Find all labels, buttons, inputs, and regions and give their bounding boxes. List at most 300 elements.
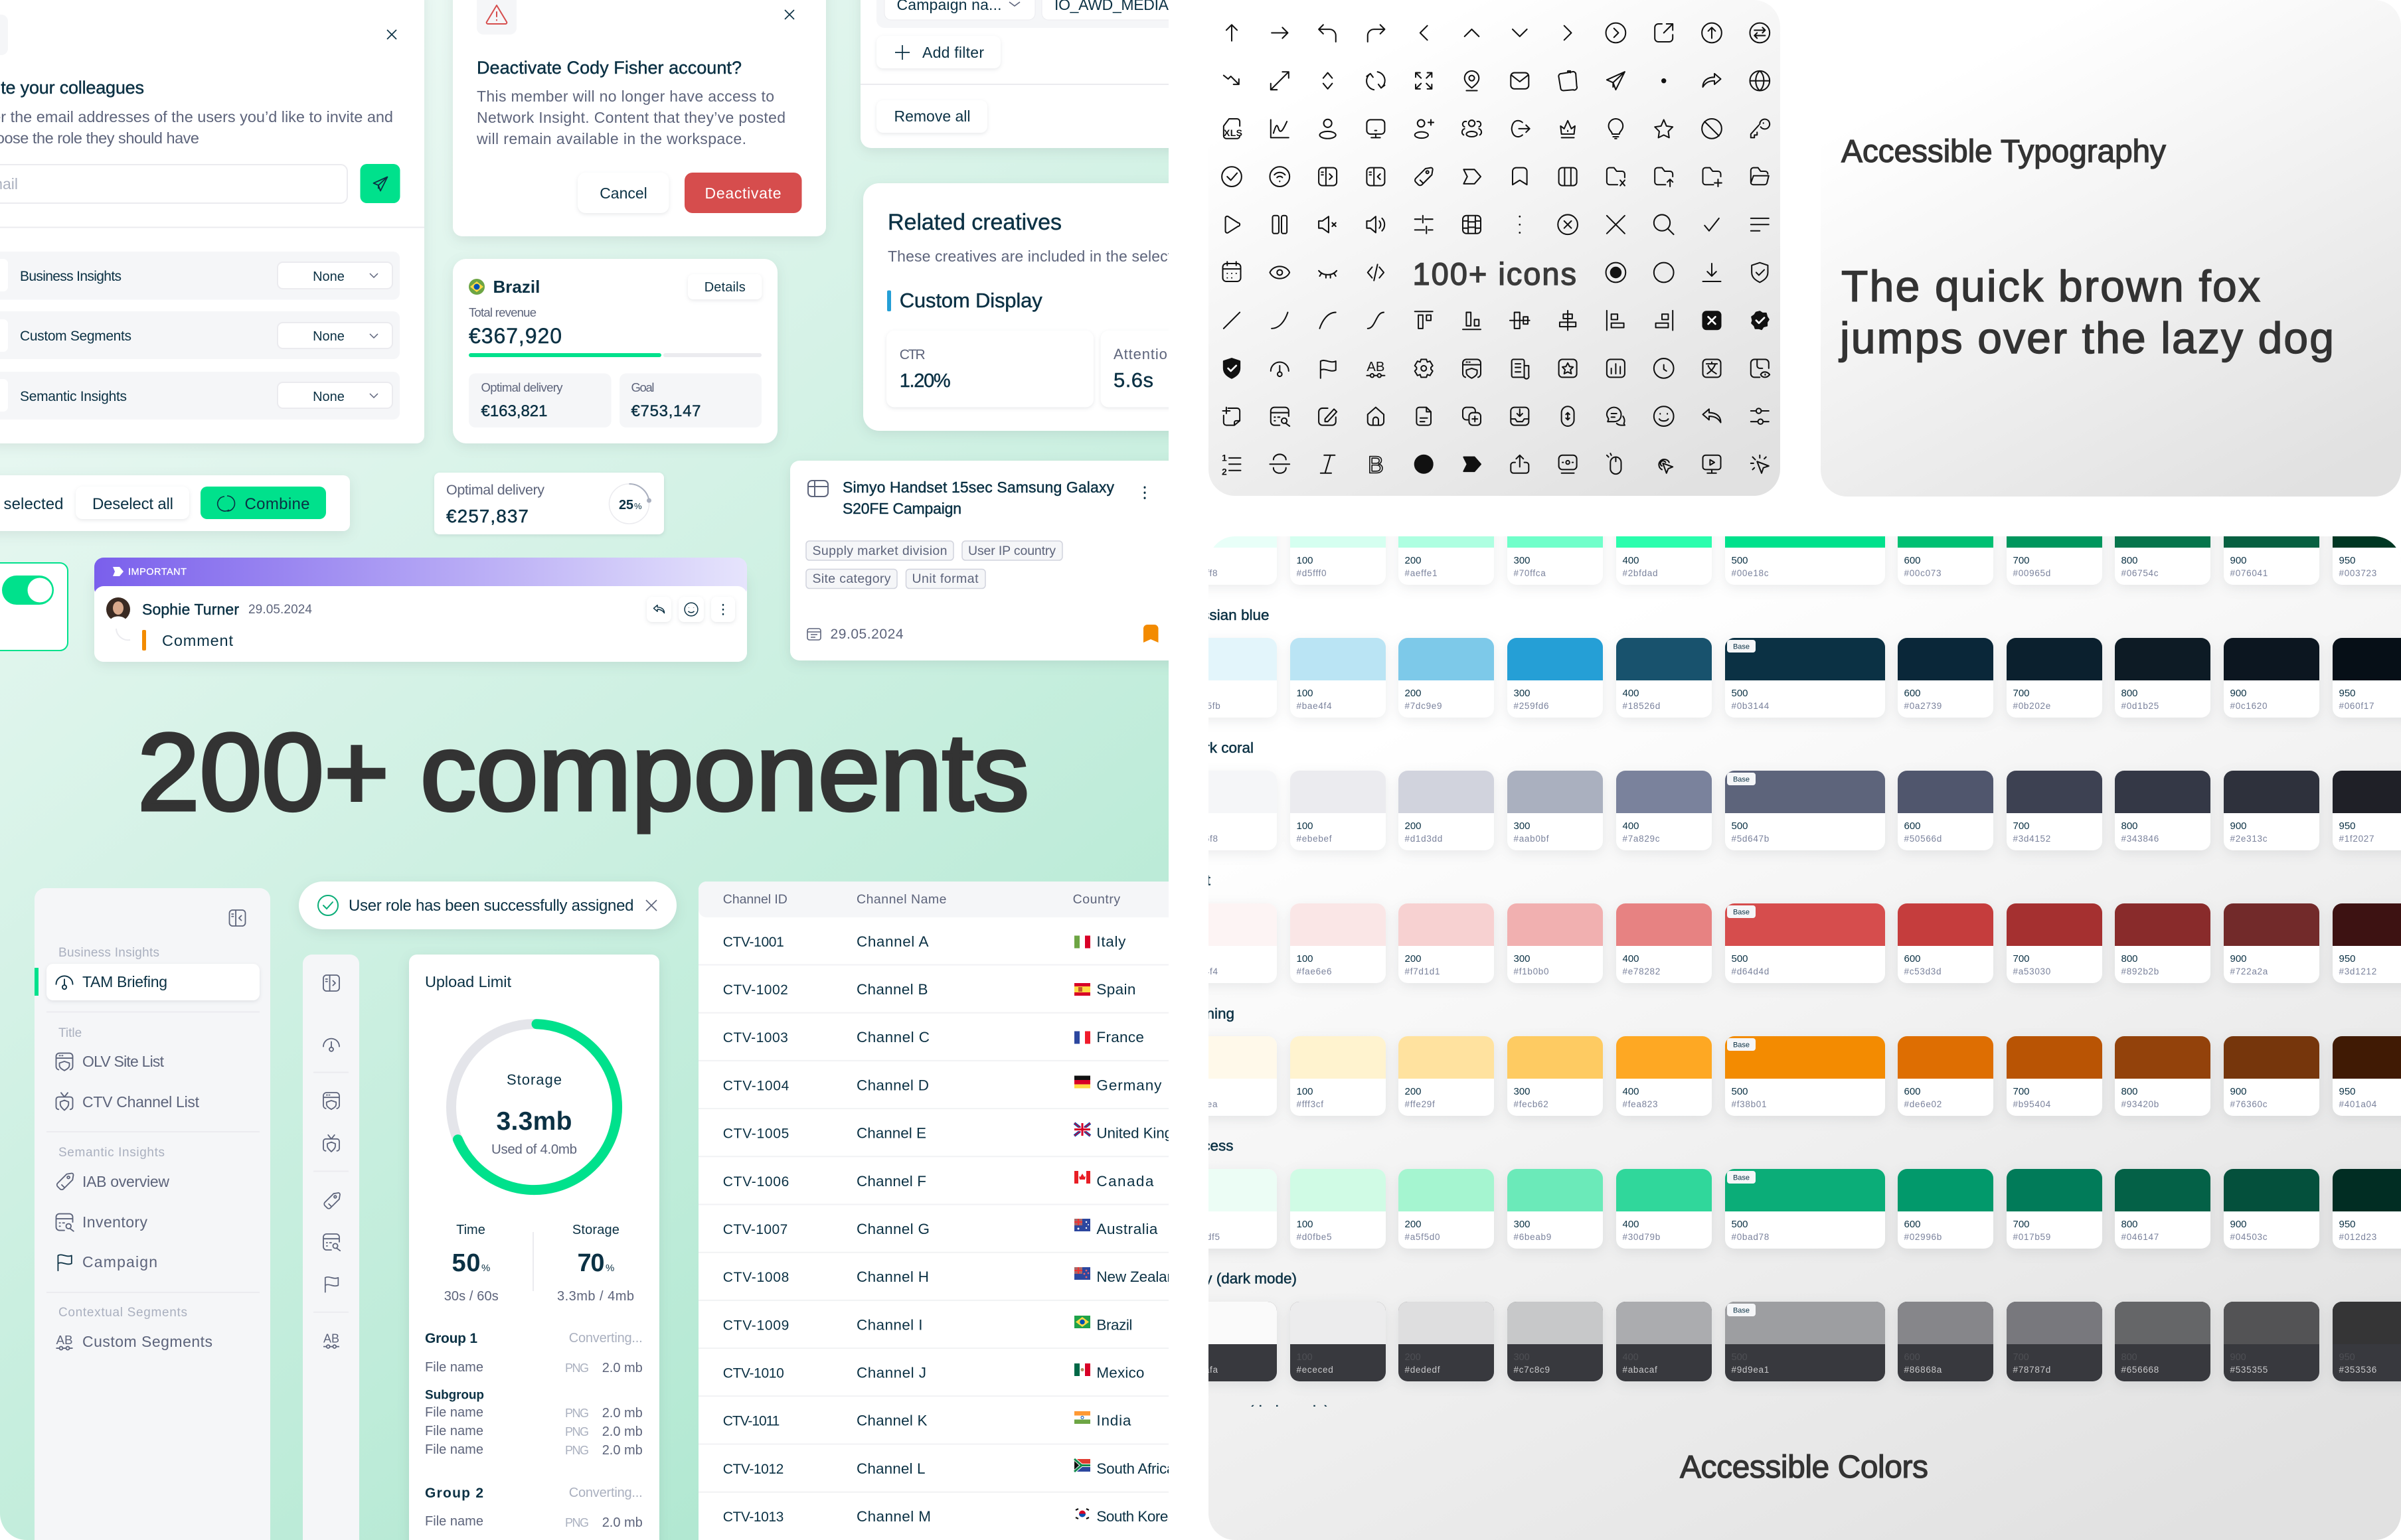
palette row: dark coral: 500	[1732, 820, 1748, 832]
heading: accessible colors: Accessible Colors	[1680, 1450, 1928, 1485]
palette row: primary green: #2bfdad	[1623, 568, 1658, 578]
palette row: success: 50	[1187, 1219, 1199, 1230]
panel: channel table: Italy	[1096, 933, 1126, 950]
panel: channel table: Germany	[1096, 1077, 1162, 1094]
panel: channel table: CTV-1005	[723, 1126, 789, 1142]
panel: Brazil revenue card: €753,147	[631, 402, 701, 420]
heading: clipped grey section label: (dark mode)	[1249, 1403, 1329, 1419]
panel: accessible colors	[1177, 505, 2401, 1540]
palette row: dark coral: 600	[1904, 820, 1921, 832]
panel: upload limit card: Group 1	[425, 1331, 477, 1346]
panel: related creatives card	[863, 183, 1169, 435]
panel: deactivate account modal	[453, 0, 826, 236]
panel: channel table: CTV-1009	[723, 1318, 789, 1333]
palette row: alert: #f7d1d1	[1405, 966, 1440, 976]
panel: combine action bar	[0, 475, 350, 531]
palette row: success: #6beab9	[1514, 1232, 1552, 1242]
palette row: Prussian blue: #bae4f4	[1296, 701, 1332, 711]
panel: channel table: Australia	[1096, 1221, 1158, 1237]
panel: channel table: CTV-1008	[723, 1270, 789, 1285]
panel: deactivate account modal: This member will no longer have access to	[477, 88, 774, 105]
panel: Brazil revenue card: €163,821	[481, 402, 547, 420]
palette row: grey dark mode: #656668	[2121, 1365, 2159, 1375]
palette row: warning: #b95404	[2013, 1099, 2051, 1109]
palette row: dark coral: 800	[2121, 820, 2138, 832]
panel: important comment card: Comment	[162, 632, 233, 649]
icon: flag Italy	[1074, 936, 1090, 948]
palette row: primary green: 500	[1732, 555, 1748, 566]
palette row: warning: 500	[1732, 1086, 1748, 1097]
palette row: dark coral: 400	[1623, 820, 1639, 832]
palette row: alert: 500	[1732, 953, 1748, 964]
icon: flag Mexico	[1074, 1363, 1090, 1376]
panel: campaign card: Unit format	[912, 572, 979, 586]
palette row: grey dark mode: #fafafa	[1187, 1365, 1218, 1375]
heading: warning: Warning	[1179, 1005, 1234, 1022]
icon: flag Spain	[1074, 983, 1090, 996]
palette row: Prussian blue: #0b3144	[1732, 701, 1770, 711]
heading: accessible typography: Accessible Typography	[1841, 134, 2166, 169]
palette row: primary green: #e8fff8	[1187, 568, 1218, 578]
palette row: Prussian blue: #0d1b25	[2121, 701, 2159, 711]
palette row: grey dark mode	[1181, 1302, 2401, 1381]
panel: upload limit card: 3.3mb / 4mb	[557, 1289, 634, 1304]
panel: invite colleagues modal: Semantic Insights	[20, 389, 127, 404]
palette row: warning: 800	[2121, 1086, 2138, 1097]
palette row: grey dark mode: 700	[2013, 1352, 2029, 1363]
palette row: primary green: 200	[1405, 555, 1422, 566]
panel: channel table: Canada	[1096, 1173, 1154, 1190]
palette row: alert	[1181, 903, 2401, 983]
palette row: alert: #c53d3d	[1904, 966, 1942, 976]
palette row: success: 800	[2121, 1219, 2138, 1230]
panel: channel table: Channel M	[857, 1508, 931, 1525]
panel: optimal delivery card: 25	[619, 498, 633, 512]
panel: upload limit card: Converting...	[569, 1331, 643, 1346]
palette row: warning: #fea823	[1623, 1099, 1658, 1109]
palette row: dark coral: 700	[2013, 820, 2030, 832]
panel: related creatives card: Related creatives	[888, 210, 1062, 235]
panel: channel table: CTV-1013	[723, 1509, 784, 1525]
panel: optimal delivery card	[434, 473, 664, 534]
palette row: primary green: 600	[1904, 555, 1921, 566]
panel: toggle card	[0, 563, 68, 651]
palette row: alert: 300	[1514, 953, 1531, 964]
panel: channel table: Channel I	[857, 1317, 923, 1333]
panel: channel table: Channel Name	[857, 892, 947, 907]
panel: channel table: United Kingdom	[1096, 1124, 1201, 1142]
panel: Brazil revenue card: Total revenue	[469, 305, 537, 319]
palette row: warning: #401a04	[2339, 1099, 2377, 1109]
panel: invite colleagues modal	[0, 0, 424, 443]
palette row: primary green: #d5fff0	[1296, 568, 1327, 578]
palette row: alert: #722a2a	[2230, 966, 2268, 976]
palette row: warning: #fecb62	[1514, 1099, 1548, 1109]
palette row: dark coral: 300	[1514, 820, 1531, 832]
palette row: grey dark mode: 800	[2121, 1352, 2137, 1363]
palette row: Prussian blue: 400	[1623, 688, 1639, 699]
panel: upload limit card: File name	[425, 1442, 483, 1457]
panel: upload limit card: %	[481, 1263, 490, 1274]
panel: collapsed sidebar	[303, 955, 359, 1540]
palette row: primary green: 50	[1187, 555, 1199, 566]
palette row: success: #046147	[2121, 1232, 2159, 1242]
palette row: warning: 950	[2339, 1086, 2356, 1097]
palette row: grey dark mode: 900	[2230, 1352, 2246, 1363]
palette row: success: 700	[2013, 1219, 2030, 1230]
text block: pangram sample	[1839, 262, 2334, 362]
palette row: Prussian blue: #259fd6	[1514, 701, 1549, 711]
panel: optimal delivery card: €257,837	[446, 506, 529, 526]
palette row: success: #04503c	[2230, 1232, 2268, 1242]
panel: upload limit card: Storage	[507, 1071, 562, 1088]
heading: success: Success	[1177, 1138, 1234, 1154]
panel: upload limit card: 3.3mb	[497, 1107, 572, 1136]
icon: flag India	[1074, 1411, 1090, 1424]
palette row: dark coral: #50566d	[1904, 834, 1942, 844]
panel: upload limit card: 2.0 mb	[602, 1406, 643, 1421]
palette row: Prussian blue: 600	[1904, 688, 1921, 699]
panel: channel table: South Africa	[1096, 1460, 1175, 1477]
palette row: warning: #ffe29f	[1405, 1099, 1435, 1109]
palette row: dark coral: #d1d3dd	[1405, 834, 1443, 844]
palette row: grey dark mode: #dededf	[1405, 1365, 1440, 1375]
panel: related creatives card: These creatives are included in the selected	[888, 248, 1189, 265]
palette row: alert: 400	[1623, 953, 1639, 964]
palette row: success: #30d79b	[1623, 1232, 1661, 1242]
palette row: primary green: #06754c	[2121, 568, 2159, 578]
panel: navigation sidebar: Contextual Segments	[58, 1306, 187, 1320]
palette row: dark coral: 50	[1187, 820, 1199, 832]
palette row: success: 100	[1296, 1219, 1313, 1230]
panel: channel table: Channel H	[857, 1269, 929, 1285]
palette row: grey dark mode: #9d9ea1	[1732, 1365, 1770, 1375]
heading: 100+ icons: 100+ icons	[1413, 256, 1576, 291]
palette row: warning: #fff9ea	[1187, 1099, 1218, 1109]
panel: invite colleagues modal: Business Insights	[20, 269, 122, 284]
panel: navigation sidebar: Business Insights	[58, 946, 159, 960]
panel: upload limit card: Time	[456, 1223, 485, 1237]
palette row: grey dark mode: #c7c8c9	[1514, 1365, 1550, 1375]
panel: channel table: New Zealand	[1096, 1269, 1183, 1285]
icon: flag Canada	[1074, 1171, 1090, 1184]
text block: pangram sample: The quick brown fox	[1841, 262, 2260, 311]
panel: channel table: Channel L	[857, 1460, 926, 1477]
palette row: success: 200	[1405, 1219, 1422, 1230]
panel: upload limit card: Upload Limit	[425, 973, 511, 990]
icon grid: 100+ line icons: XLS	[1224, 127, 1242, 138]
panel: upload limit card: Converting...	[569, 1486, 643, 1500]
panel: deactivate account modal: will remain available in the workspace.	[476, 130, 746, 147]
heading: Prussian blue: Prussian blue	[1179, 607, 1270, 623]
icon grid: 100+ line icons: B	[1368, 451, 1384, 478]
panel: upload limit card: File name	[425, 1424, 483, 1438]
palette row: grey dark mode: 600	[1904, 1352, 1920, 1363]
panel: upload limit card: PNG	[565, 1361, 589, 1375]
panel: campaign card: Supply market division	[813, 544, 947, 558]
palette row: grey dark mode: #abacaf	[1623, 1365, 1657, 1375]
callout: success toast	[299, 882, 677, 929]
panel: channel table: Channel C	[857, 1029, 930, 1045]
panel: channel table: South Korea	[1096, 1508, 1177, 1525]
palette row: alert: #892b2b	[2121, 966, 2159, 976]
heading: dark coral: Dark coral	[1185, 739, 1254, 756]
palette row: success: #012d23	[2339, 1232, 2377, 1242]
palette row: success	[1181, 1169, 2401, 1249]
panel: upload limit card: 2.0 mb	[602, 1515, 643, 1530]
panel: upload limit card: Used of 4.0mb	[491, 1142, 577, 1157]
panel: upload limit card: 50	[452, 1249, 481, 1277]
panel: upload limit card: %	[606, 1263, 614, 1274]
panel: channel table: CTV-1011	[723, 1414, 780, 1428]
palette row: primary green: 950	[2339, 555, 2356, 566]
palette row: dark coral: #aab0bf	[1514, 834, 1549, 844]
palette row: primary green: #00e18c	[1732, 568, 1769, 578]
icon: flag New Zealand	[1074, 1267, 1090, 1280]
palette row: Prussian blue: #e3f5fb	[1187, 701, 1220, 711]
palette row: primary green: #003723	[2339, 568, 2377, 578]
palette row: grey dark mode: 200	[1405, 1352, 1421, 1363]
panel: channel table: CTV-1002	[723, 982, 788, 998]
palette row: alert: 100	[1296, 953, 1313, 964]
palette row: warning: #de6e02	[1904, 1099, 1942, 1109]
panel: channel table: Brazil	[1096, 1317, 1132, 1333]
panel: filters card	[861, 0, 1206, 148]
panel: channel table: Country	[1073, 892, 1120, 907]
panel: upload limit card: PNG	[565, 1425, 589, 1438]
panel: channel table: Channel F	[857, 1173, 926, 1190]
panel: channel table: Channel A	[857, 933, 928, 950]
palette row: alert: 200	[1405, 953, 1422, 964]
panel: channel table: India	[1096, 1413, 1131, 1428]
panel: Brazil revenue card: Brazil	[493, 277, 540, 297]
palette row: alert: #fdf4f4	[1187, 966, 1218, 976]
palette row: dark coral: #f5f6f8	[1187, 834, 1218, 844]
palette row: alert: #3d1212	[2339, 966, 2377, 976]
palette row: primary green	[1181, 505, 2401, 585]
panel: upload limit card: 2.0 mb	[602, 1424, 643, 1439]
title: 200+ components: 200+ components	[137, 711, 1029, 833]
palette row: dark coral: #343846	[2121, 834, 2159, 844]
panel: navigation sidebar: TAM Briefing	[82, 973, 167, 990]
panel: campaign card: Simyo Handset 15sec Samsung Galaxy	[843, 479, 1114, 496]
panel: important comment card: IMPORTANT	[128, 567, 187, 578]
panel: navigation sidebar	[35, 888, 270, 1540]
panel: Brazil revenue card	[453, 259, 778, 443]
panel: channel table: CTV-1010	[723, 1366, 784, 1381]
panel: navigation sidebar: CTV Channel List	[82, 1093, 200, 1111]
palette row: Prussian blue: #18526d	[1623, 701, 1661, 711]
panel: related creatives card: Attention	[1114, 346, 1176, 362]
panel: channel table: CTV-1003	[723, 1030, 788, 1045]
palette row: Prussian blue: 50	[1187, 688, 1199, 699]
palette row: warning: 200	[1405, 1086, 1422, 1097]
palette row: warning: 50	[1187, 1086, 1199, 1097]
palette row: dark coral: 200	[1405, 820, 1422, 832]
panel: accessible typography	[1821, 0, 2401, 497]
palette row: Prussian blue: #0c1620	[2230, 701, 2268, 711]
icon: flag Australia	[1074, 1219, 1090, 1231]
palette row: success: 500	[1732, 1219, 1748, 1230]
panel: deactivate account modal: Network Insight. Content that they’ve posted	[477, 109, 786, 126]
panel: channel table: Channel E	[857, 1124, 926, 1142]
panel: upload limit card: 70	[578, 1249, 604, 1277]
panel: related creatives card: Custom Display	[900, 289, 1042, 312]
palette row: alert: 600	[1904, 953, 1921, 964]
panel: navigation sidebar: Campaign	[82, 1253, 157, 1270]
palette row: alert: #e78282	[1623, 966, 1661, 976]
panel: related creatives card: CTR	[900, 347, 926, 362]
palette row: grey dark mode: 100	[1296, 1352, 1313, 1363]
panel: related creatives card: 1.20%	[900, 370, 951, 392]
panel: combine action bar: selected	[4, 495, 64, 513]
panel: upload limit card: PNG	[565, 1444, 589, 1457]
palette row: Prussian blue: 950	[2339, 688, 2356, 699]
panel: important comment card: 29.05.2024	[248, 603, 312, 617]
palette row: grey dark mode: #353536	[2339, 1365, 2377, 1375]
palette row: Prussian blue: #0b202e	[2013, 701, 2051, 711]
palette row: Prussian blue: 800	[2121, 688, 2138, 699]
panel: navigation sidebar: Title	[58, 1026, 82, 1040]
panel: channel table	[699, 882, 1201, 1540]
palette row: grey dark mode: 950	[2339, 1352, 2355, 1363]
panel: upload limit card: 30s / 60s	[444, 1289, 499, 1304]
palette row: dark coral	[1181, 771, 2401, 850]
panel: upload limit card: 2.0 mb	[602, 1361, 643, 1375]
palette row: Prussian blue: #0a2739	[1904, 701, 1942, 711]
palette row: grey dark mode: #78787d	[2013, 1365, 2051, 1375]
panel: campaign card: Site category	[813, 572, 891, 586]
panel: upload limit card: File name	[425, 1405, 483, 1420]
panel: upload limit card: Storage	[572, 1223, 620, 1237]
panel: upload limit card: File name	[425, 1360, 483, 1375]
palette row: grey dark mode: #ececed	[1296, 1365, 1333, 1375]
panel: related creatives card: 5.6s	[1114, 368, 1153, 392]
panel: navigation sidebar: Custom Segments	[82, 1333, 212, 1350]
palette row: alert: 700	[2013, 953, 2030, 964]
panel: Brazil revenue card: Details	[704, 280, 746, 295]
panel: combine action bar: Combine	[244, 495, 309, 513]
palette row: warning: #76360c	[2230, 1099, 2268, 1109]
panel: optimal delivery card: Optimal delivery	[446, 482, 544, 498]
palette row: primary green: #00c073	[1904, 568, 1942, 578]
panel: Brazil revenue card: Goal	[631, 380, 655, 394]
palette row: warning: #f38b01	[1732, 1099, 1767, 1109]
palette row: success: #a5f5d0	[1405, 1232, 1440, 1242]
palette row: dark coral: #ebebef	[1296, 834, 1332, 844]
palette row: primary green: #076041	[2230, 568, 2268, 578]
palette row: success: #d0fbe5	[1296, 1232, 1332, 1242]
palette row: success: 400	[1623, 1219, 1639, 1230]
panel: Brazil revenue card: €367,920	[469, 324, 562, 348]
panel: navigation sidebar: OLV Site List	[82, 1053, 165, 1070]
panel: invite colleagues modal: None	[313, 329, 345, 344]
panel: navigation sidebar: Semantic Insights	[58, 1146, 165, 1160]
palette row: dark coral: 950	[2339, 820, 2356, 832]
panel: upload limit card: PNG	[565, 1516, 589, 1529]
palette row: grey dark mode: #86868a	[1904, 1365, 1942, 1375]
panel: filters card: Remove all	[894, 108, 971, 125]
palette row: primary green: 400	[1623, 555, 1639, 566]
panel: icon library	[1208, 0, 1780, 496]
palette row: Prussian blue: 100	[1296, 688, 1313, 699]
palette row: grey dark mode: #535355	[2230, 1365, 2268, 1375]
panel: upload limit card: Subgroup	[425, 1389, 484, 1402]
palette row: grey dark mode: 300	[1514, 1352, 1530, 1363]
panel: channel table: Channel K	[857, 1413, 927, 1428]
palette row: Prussian blue: 900	[2230, 688, 2247, 699]
palette row: warning: 300	[1514, 1086, 1531, 1097]
icon: flag France	[1074, 1032, 1090, 1043]
panel: channel table: CTV-1012	[723, 1462, 784, 1477]
panel: optimal delivery card: %	[634, 501, 642, 511]
palette row: Prussian blue: 700	[2013, 688, 2030, 699]
panel: Brazil revenue card: Optimal delivery	[481, 380, 563, 394]
palette row: alert: 950	[2339, 953, 2356, 964]
palette row: primary green: #00965d	[2013, 568, 2051, 578]
palette row: primary green: 800	[2121, 555, 2138, 566]
palette row: alert: #fae6e6	[1296, 966, 1332, 976]
icon grid: 100+ line icons	[1222, 23, 1770, 478]
palette row: alert: #f1b0b0	[1514, 966, 1549, 976]
palette row: alert: 50	[1187, 953, 1199, 964]
palette row: Prussian blue: 300	[1514, 688, 1531, 699]
palette row: primary green: #aeffe1	[1405, 568, 1438, 578]
panel: invite colleagues modal: None	[313, 390, 345, 404]
palette row: alert: #d64d4d	[1732, 966, 1770, 976]
palette row: dark coral: #5d647b	[1732, 834, 1770, 844]
palette row: primary green: 300	[1514, 555, 1531, 566]
palette row: Prussian blue: 200	[1405, 688, 1422, 699]
panel: channel table: CTV-1006	[723, 1174, 789, 1190]
palette row: primary green: 700	[2013, 555, 2030, 566]
icon: flag South Korea	[1074, 1507, 1090, 1520]
palette row: success: #02996b	[1904, 1232, 1942, 1242]
palette row: Prussian blue	[1181, 638, 2401, 718]
panel: channel table: Channel J	[857, 1365, 926, 1381]
icon: flag Brazil	[1074, 1316, 1090, 1328]
panel: upload limit card: File name	[425, 1514, 483, 1529]
panel: upload limit card: 2.0 mb	[602, 1443, 643, 1458]
palette row: dark coral: 900	[2230, 820, 2247, 832]
panel: channel table: Channel D	[857, 1077, 929, 1094]
palette row: warning	[1181, 1036, 2401, 1116]
panel: filters card: Add filter	[922, 44, 984, 61]
heading: alert: Alert	[1180, 872, 1211, 888]
icon grid: 100+ line icons: 2	[1222, 466, 1227, 477]
palette row: primary green: 900	[2230, 555, 2247, 566]
panel: invite colleagues modal: None	[313, 270, 345, 284]
panel: campaign card: User IP country	[968, 544, 1056, 558]
panel: channel table: Spain	[1096, 981, 1135, 998]
palette row: warning: 400	[1623, 1086, 1639, 1097]
icon: flag United Kingdom	[1074, 1123, 1090, 1136]
palette row: success: 950	[2339, 1219, 2356, 1230]
palette row: success: #017b59	[2013, 1232, 2051, 1242]
panel: deactivate account modal: Deactivate Cody Fisher account?	[477, 58, 742, 78]
callout: success toast: User role has been successfully assigned	[349, 897, 633, 915]
panel: channel table: Channel B	[857, 981, 928, 998]
icon: flag Germany	[1074, 1075, 1090, 1089]
panel: upload limit card	[409, 955, 659, 1540]
palette row: alert: 800	[2121, 953, 2138, 964]
palette row: success: 900	[2230, 1219, 2247, 1230]
palette row: Prussian blue: #060f17	[2339, 701, 2374, 711]
palette row: dark coral: 100	[1296, 820, 1313, 832]
palette row: success: #0bad78	[1732, 1232, 1770, 1242]
palette row: warning: #fff3cf	[1296, 1099, 1324, 1109]
palette row: dark coral: #1f2027	[2339, 834, 2374, 844]
